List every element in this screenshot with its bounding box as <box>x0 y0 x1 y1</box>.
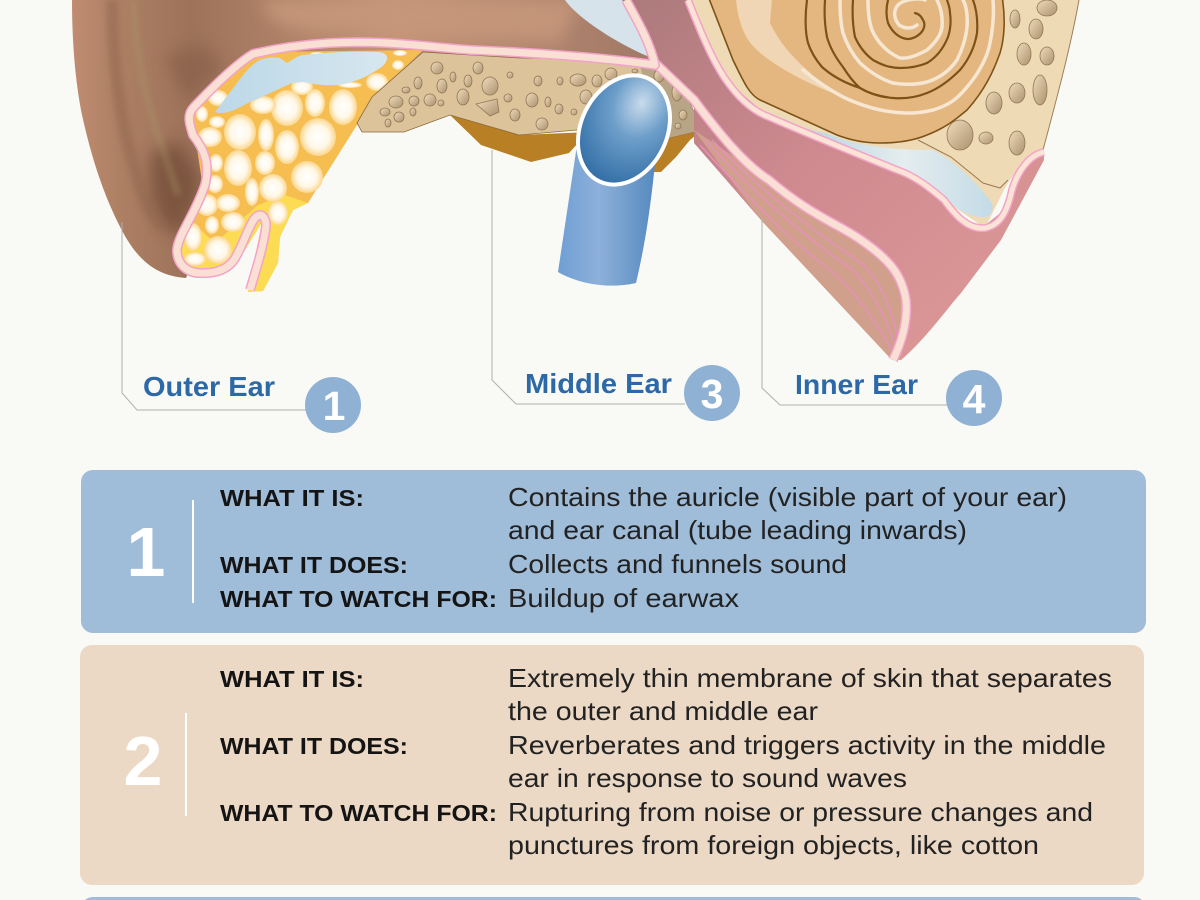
skin lining of ear canal <box>177 0 655 290</box>
temporal bone <box>357 52 702 172</box>
inner skin lining <box>688 0 1044 228</box>
what to watch for row: Buildup of earwax <box>508 583 739 613</box>
what it is row: Extremely thin membrane of skin that separates <box>508 663 1112 693</box>
cartilage <box>215 52 387 113</box>
what it does row: Collects and funnels sound <box>508 549 847 579</box>
what it is row: and ear canal (tube leading inwards) <box>508 515 967 545</box>
eardrum <box>565 0 647 56</box>
callout: inner ear: 4 <box>963 376 986 422</box>
callout: inner ear <box>762 218 1002 426</box>
what it is row: Contains the auricle (visible part of your ear) <box>508 482 1067 512</box>
callout: outer ear <box>122 222 361 433</box>
callout: outer ear: 1 <box>323 383 345 429</box>
what it is row: WHAT IT IS: <box>220 485 364 511</box>
what to watch for row: punctures from foreign objects, like cotton <box>508 830 1039 860</box>
what it is row: the outer and middle ear <box>508 696 818 726</box>
what it does row <box>220 730 1106 793</box>
what it does row <box>220 549 847 579</box>
panel: middle ear details (cropped) <box>81 897 1146 900</box>
callout: inner ear: Inner Ear <box>795 369 918 400</box>
what to watch for row <box>220 797 1093 860</box>
what it is row <box>220 663 1112 726</box>
eustachian tube <box>558 60 688 286</box>
callout: middle ear: Middle Ear <box>525 368 672 399</box>
what it does row: WHAT IT DOES: <box>220 733 408 759</box>
what to watch for row: WHAT TO WATCH FOR: <box>220 586 497 612</box>
fatty tissue <box>180 50 423 292</box>
outer ear auricle <box>72 0 660 278</box>
what to watch for row: WHAT TO WATCH FOR: <box>220 800 497 826</box>
what it does row: WHAT IT DOES: <box>220 552 408 578</box>
panel: eardrum details <box>80 645 1144 885</box>
inner ear membrane <box>626 0 1044 360</box>
callout: outer ear: Outer Ear <box>143 371 275 402</box>
callout: middle ear <box>492 150 740 421</box>
what it is row <box>220 482 1067 545</box>
what it does row: Reverberates and triggers activity in the middle <box>508 730 1106 760</box>
callout: middle ear: 3 <box>701 371 723 417</box>
ear anatomy illustration <box>72 0 1079 360</box>
panel number 2: 2 <box>124 722 162 800</box>
what it is row: WHAT IT IS: <box>220 666 364 692</box>
cochlea <box>708 0 1004 143</box>
what to watch for row <box>220 583 739 613</box>
what it does row: ear in response to sound waves <box>508 763 907 793</box>
perilymph fluid <box>772 110 993 217</box>
panel number 1: 1 <box>127 513 165 591</box>
what to watch for row: Rupturing from noise or pressure changes and <box>508 797 1093 827</box>
petrous bone <box>690 0 1079 228</box>
panel: outer ear details <box>81 470 1146 633</box>
